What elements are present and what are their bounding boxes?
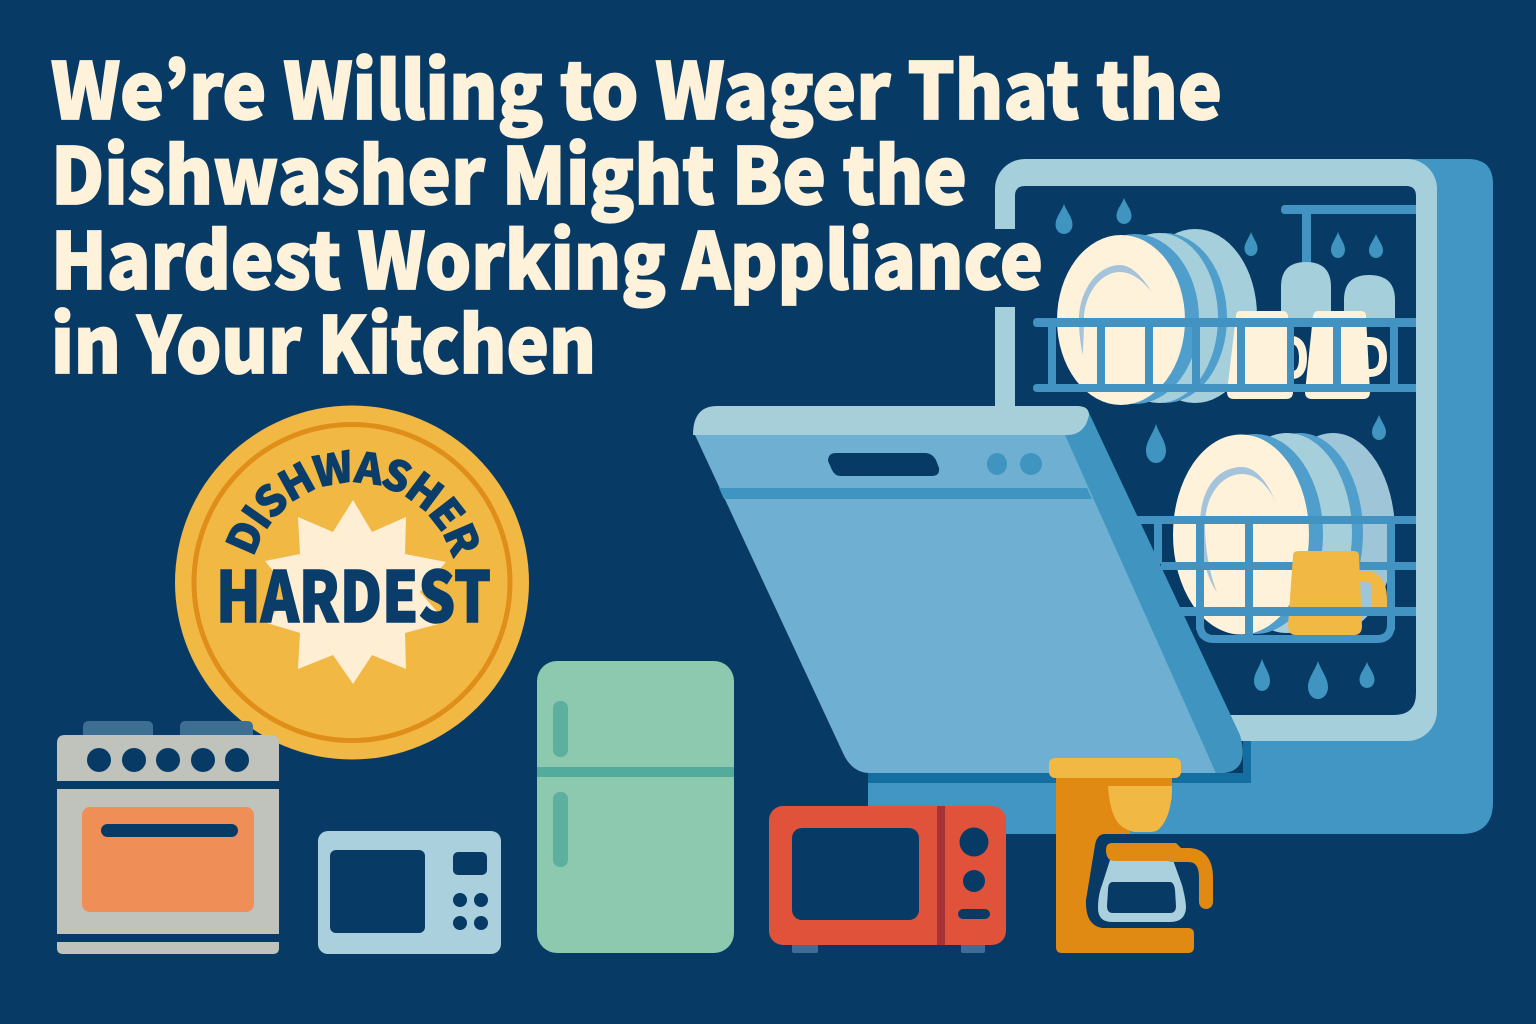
badge ring: [194, 424, 510, 740]
frame gap behind title: [990, 229, 1016, 307]
yellow mug: [1288, 551, 1387, 635]
feet: [792, 940, 985, 953]
carafe handle: [1172, 855, 1206, 902]
badge arc text: DISHWASHER: [225, 449, 479, 560]
icon: small blue microwave: [318, 831, 501, 954]
display: [453, 852, 487, 875]
carafe interior: [1107, 882, 1176, 913]
fridge handles: [553, 701, 568, 867]
oven body: [57, 789, 279, 934]
lower rack plates: [1173, 433, 1395, 634]
title: We’re Willing to Wager That the: [51, 30, 1222, 142]
knobs: [87, 748, 249, 772]
icon: refrigerator: [537, 661, 734, 953]
icon: stove oven: [57, 721, 279, 954]
carafe: [1098, 860, 1186, 922]
lower rack lower wires: [1180, 607, 1416, 639]
dishwasher body: [868, 159, 1493, 834]
casing: [318, 831, 501, 954]
control panel: [57, 735, 279, 781]
title: Hardest Working Appliance: [51, 200, 1043, 312]
lower rack upper wires: [1136, 516, 1416, 636]
door stripe: [719, 488, 1092, 499]
burners: [83, 721, 253, 735]
coffee maker body: [1056, 776, 1194, 953]
oven handle: [101, 824, 238, 837]
oven window: [82, 807, 254, 912]
fridge body: [537, 661, 734, 953]
badge starburst: [265, 500, 446, 684]
title: in Your Kitchen: [51, 284, 596, 396]
divider: [937, 806, 945, 945]
badge: dishwasher hardest: [175, 406, 529, 760]
glasses: [1281, 262, 1395, 318]
title: [51, 30, 1222, 396]
door side: [1060, 407, 1243, 773]
dishwasher base shadow strip: [868, 741, 1251, 783]
knobs: [958, 828, 990, 919]
window: [330, 850, 425, 933]
icon: red microwave: [769, 806, 1006, 953]
badge disc: [175, 406, 529, 760]
water drops: [1056, 198, 1386, 699]
hanging rail: [1281, 205, 1416, 264]
upper rack plates: [1057, 229, 1257, 405]
icon: coffee maker: [1049, 758, 1206, 953]
door handle: [828, 453, 939, 476]
door buttons: [987, 453, 1042, 475]
door front panel: [695, 435, 1216, 773]
tub frame: [995, 159, 1437, 741]
upper rack cups: [1227, 311, 1383, 399]
lid: [1049, 758, 1181, 778]
illustration: open dishwasher: [693, 159, 1493, 834]
door top bar: [693, 406, 1089, 435]
tub interior: [1015, 186, 1416, 715]
badge main text: HARDEST: [216, 542, 491, 643]
oven base: [57, 942, 279, 954]
buttons: [453, 893, 488, 930]
title: Dishwasher Might Be the: [51, 115, 967, 227]
fridge divider: [537, 767, 734, 777]
window: [792, 828, 919, 920]
upper rack wire: [1033, 318, 1416, 392]
filter basket: [1108, 786, 1172, 832]
carafe collar: [1106, 843, 1182, 861]
casing: [769, 806, 1006, 945]
